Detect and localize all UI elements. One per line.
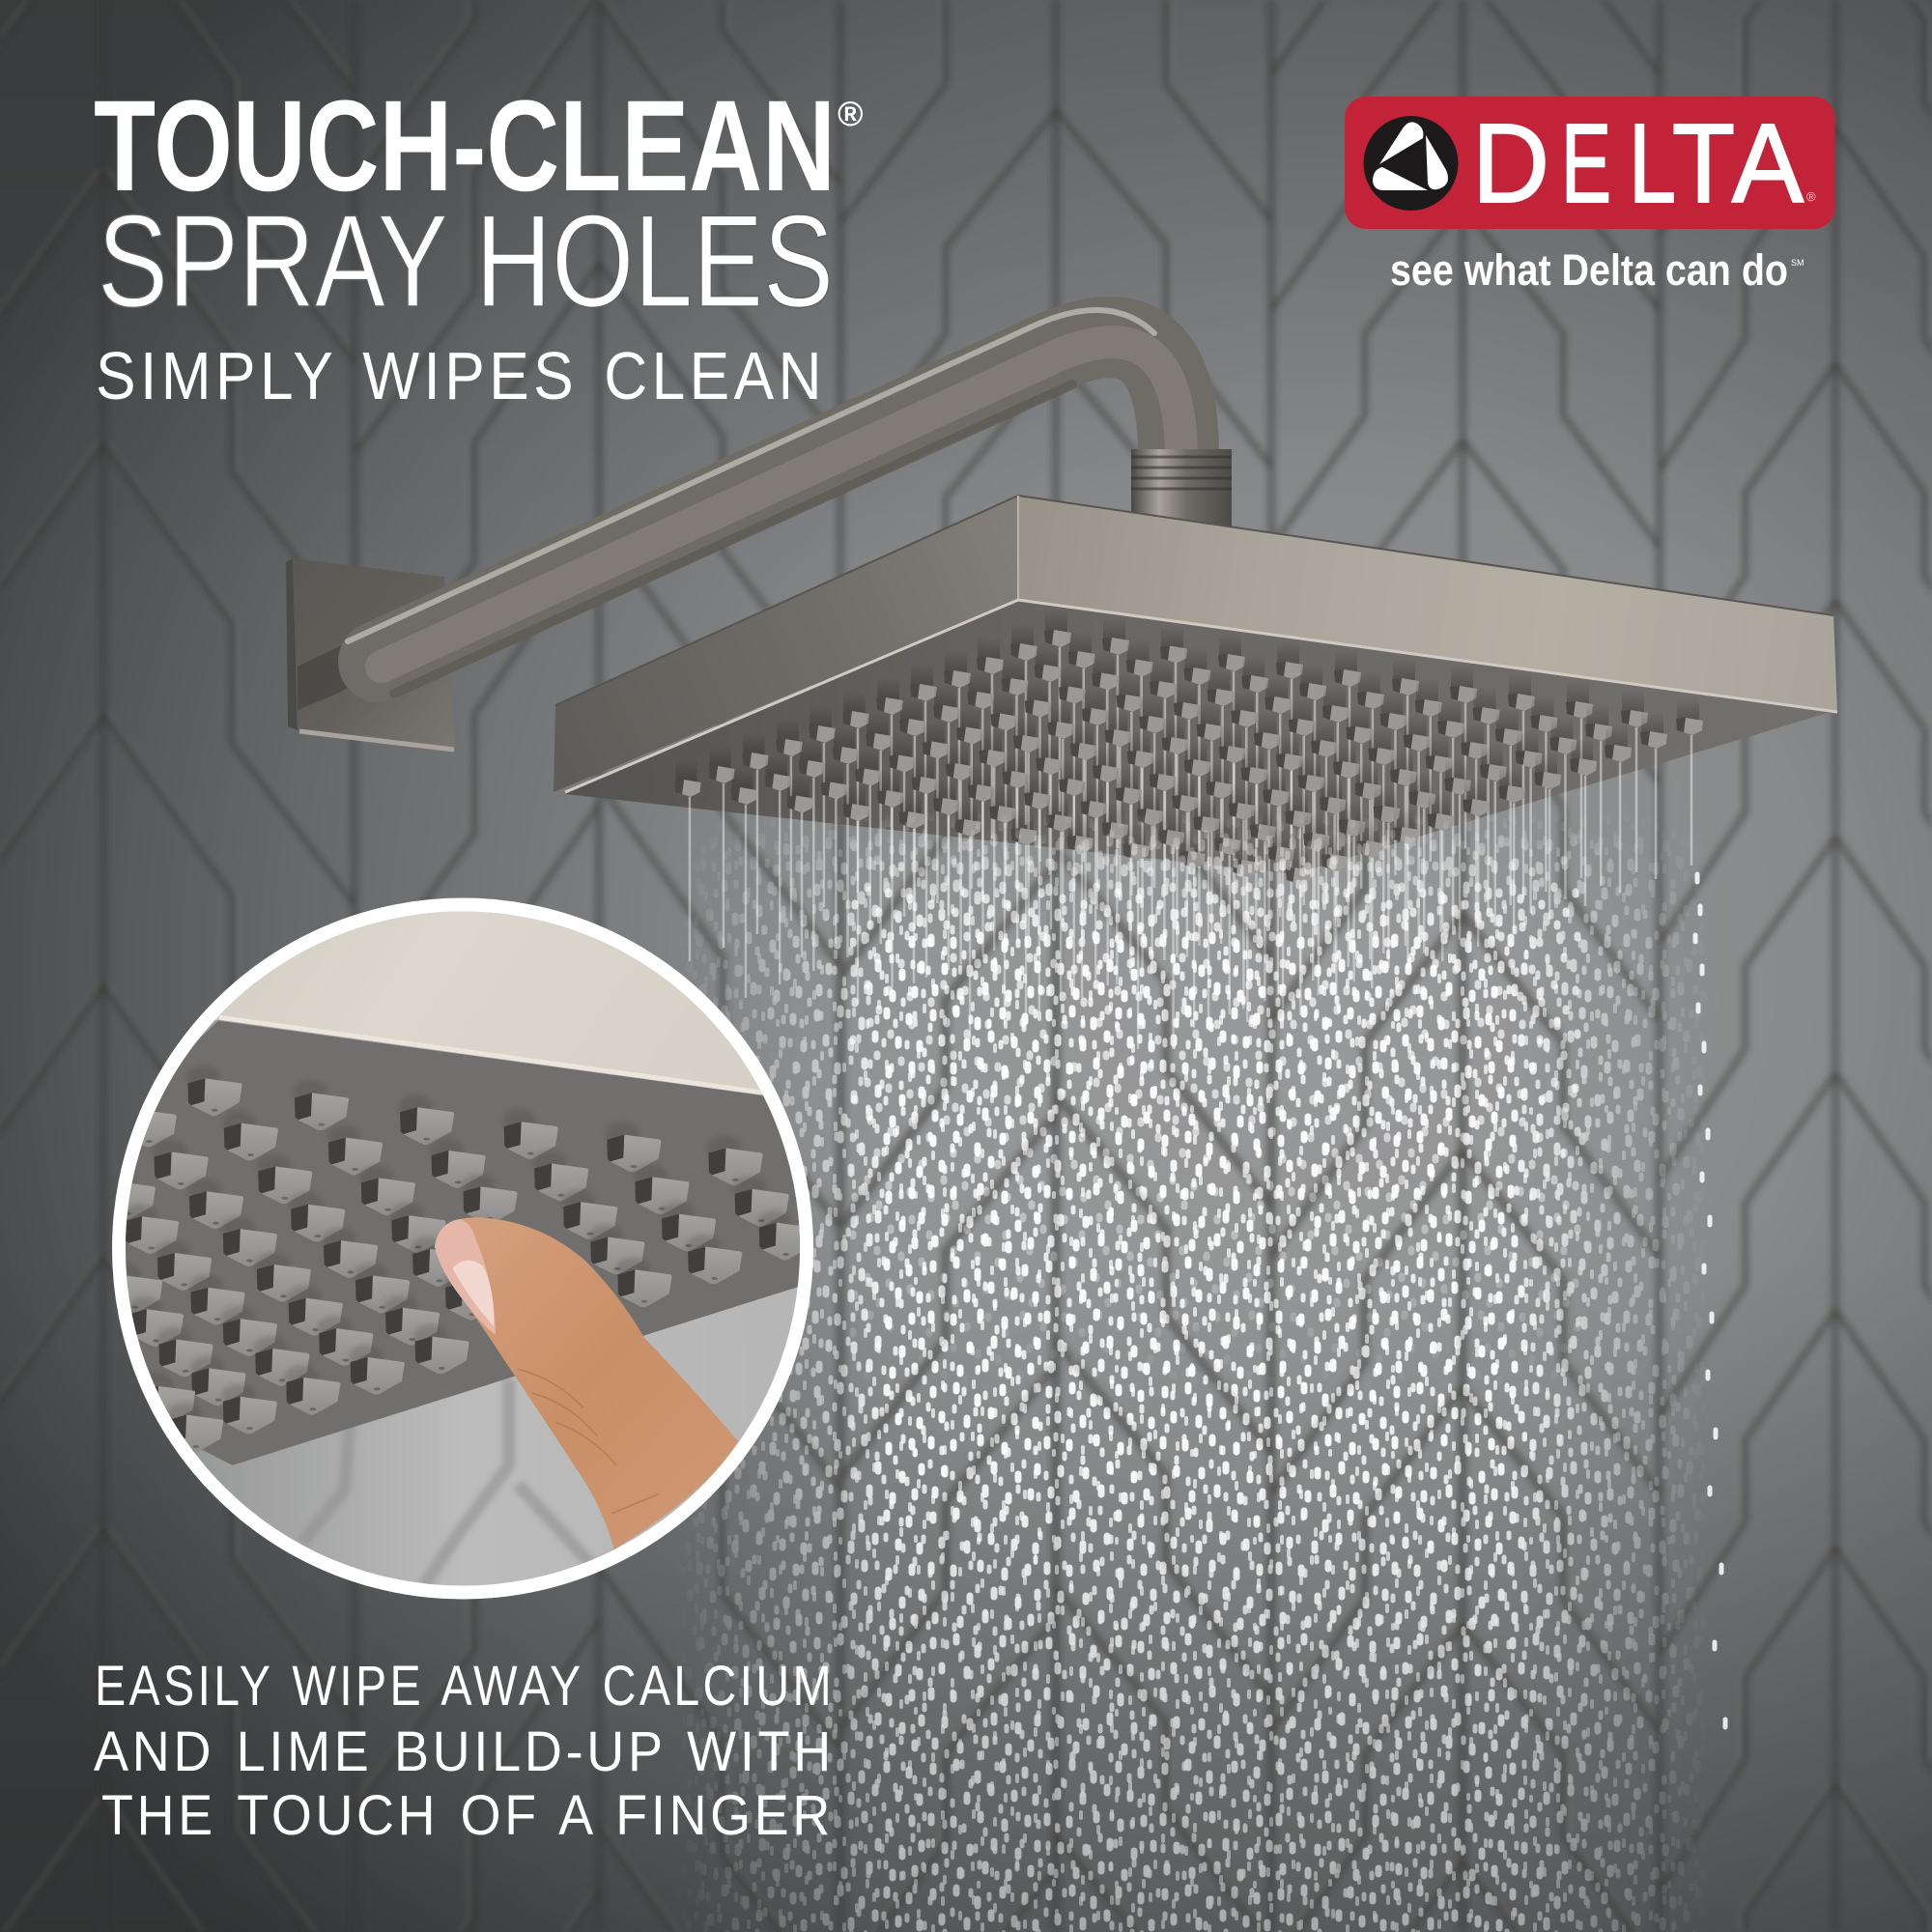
wall mount escutcheon plate — [286, 558, 455, 750]
inset: nozzles — [99, 1065, 813, 1452]
service mark: SM — [1791, 258, 1804, 268]
inset: close-up photo — [126, 912, 800, 1586]
Delta logo — [1345, 97, 1835, 229]
logo: wordmark: T — [1672, 100, 1735, 226]
logo: registered mark: ® — [1806, 189, 1816, 204]
brand slogan: see what Delta can do — [1390, 245, 1788, 295]
logo: wordmark: E — [1561, 100, 1611, 226]
caption: THE TOUCH OF A FINGER — [101, 1784, 834, 1847]
title: Touch-Clean: TOUCH-CLEAN — [94, 74, 836, 218]
logo: black circle with triangle mark — [1364, 116, 1459, 211]
tile grout seen through water — [782, 844, 1625, 1930]
tagline: simply wipes clean: SIMPLY WIPES CLEAN — [96, 338, 826, 413]
sparse droplets at right edge of spray — [1695, 874, 1725, 1727]
logo: wordmark: D — [1472, 100, 1549, 226]
inset: head front face — [214, 912, 763, 1094]
inset circle: finger wiping spray nozzles — [112, 898, 813, 1600]
inset: white ring — [112, 898, 813, 1600]
inset: finger — [435, 1217, 738, 1549]
inset: fingernail — [435, 1219, 496, 1335]
head: edges — [555, 496, 1833, 705]
inset: skin wrinkles — [518, 1369, 659, 1514]
head: underside — [565, 600, 1831, 874]
spray nozzles and water jets — [674, 610, 1703, 1049]
falling water droplets — [657, 811, 1758, 1932]
caption — [94, 1655, 835, 1847]
registered mark: ® — [838, 94, 864, 133]
logo: wordmark: L — [1629, 100, 1676, 226]
head: left side face — [554, 496, 1018, 792]
caption: EASILY WIPE AWAY CALCIUM — [95, 1655, 835, 1718]
dense upper water cluster — [850, 831, 1584, 1401]
subtitle: spray holes: SPRAY HOLES — [98, 187, 834, 334]
logo: red badge — [1345, 97, 1835, 229]
head: lit lower edge — [565, 600, 1837, 792]
caption: AND LIME BUILD-UP WITH — [94, 1720, 835, 1783]
shower arm — [348, 310, 1181, 694]
logo: wordmark — [1472, 100, 1804, 226]
logo: wordmark: A — [1732, 100, 1804, 226]
head: right side face — [1018, 496, 1837, 712]
threaded arm collar — [1131, 449, 1232, 531]
inset: head underside — [125, 1021, 804, 1465]
rain shower head — [554, 496, 1837, 1049]
